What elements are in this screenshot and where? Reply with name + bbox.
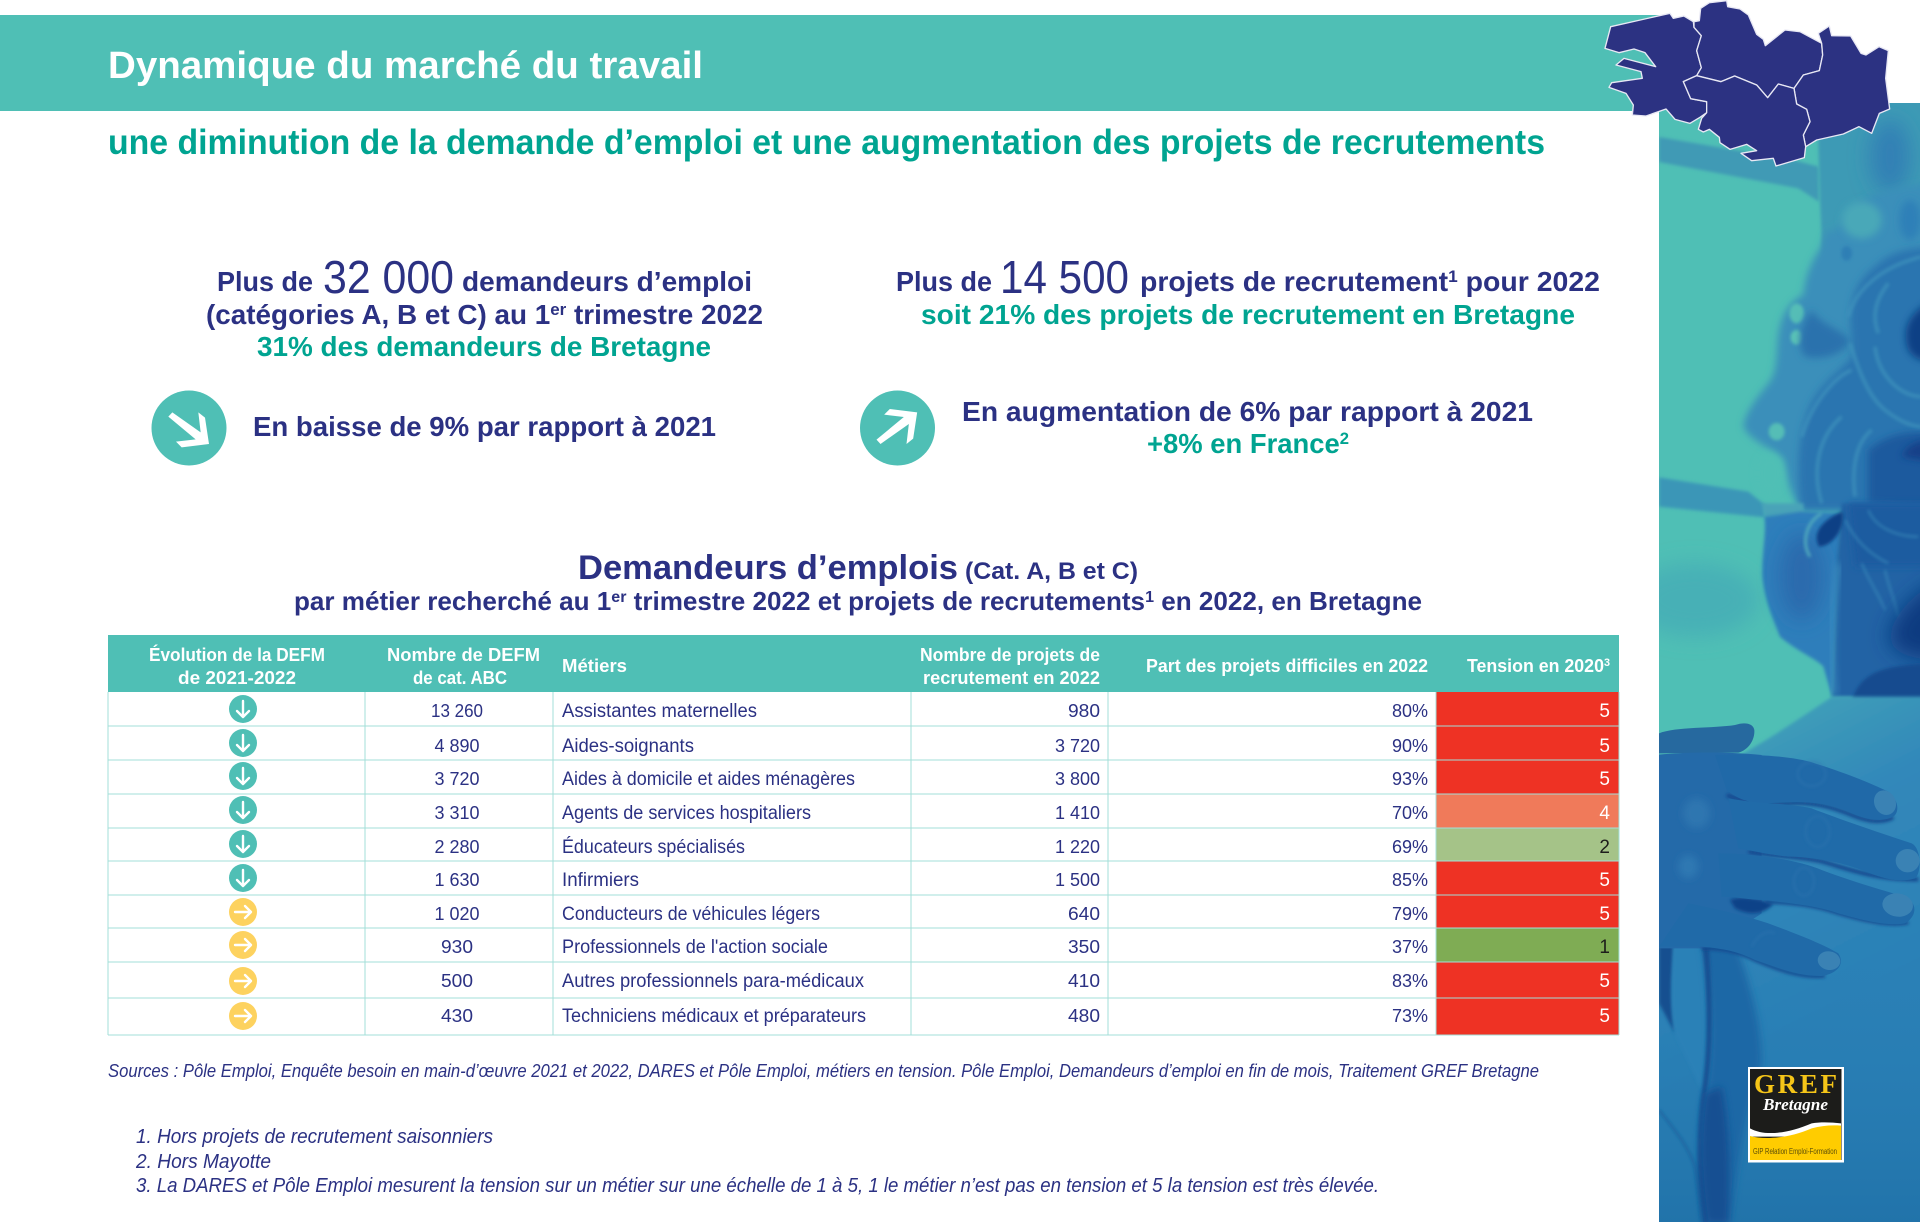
column: métiers: Éducateurs spécialisés: [562, 837, 745, 858]
column: part des projets difficiles: 70%: [1392, 803, 1428, 823]
table header row: 3: [1604, 657, 1610, 669]
column: projets de recrutement: 980: [1068, 701, 1100, 721]
icon: arrow up-right: [860, 390, 935, 466]
stat block: demandeurs d'emploi: demandeurs d’emploi: [462, 266, 752, 297]
column: part des projets difficiles: 80%: [1392, 701, 1428, 721]
column: nombre de DEFM: 2 280: [434, 837, 480, 857]
column: métiers: Autres professionnels para-médicaux: [562, 971, 864, 992]
column: projets de recrutement: 350: [1068, 937, 1100, 957]
logo: GREF Bretagne: Bretagne: [1762, 1095, 1828, 1114]
callout: augmentation: 2: [1340, 429, 1349, 448]
table header row: Part des projets difficiles en 2022: [1146, 656, 1428, 676]
column: part des projets difficiles: 37%: [1392, 937, 1428, 957]
table header row: Tension en 2020: [1467, 656, 1606, 676]
column: nombre de DEFM: 430: [441, 1006, 473, 1026]
column: tension values: 5: [1599, 904, 1610, 925]
column: projets de recrutement: 3 720: [1055, 736, 1100, 756]
stat block: projets de recrutement: pour 2022: [1458, 266, 1600, 297]
column: part des projets difficiles: [1392, 701, 1428, 1026]
callout: augmentation: +8% en France: [1147, 428, 1344, 459]
column: part des projets difficiles: 85%: [1392, 870, 1428, 890]
column: part des projets difficiles: 83%: [1392, 971, 1428, 991]
column: métiers: Agents de services hospitaliers: [562, 803, 811, 824]
column: nombre de DEFM: 3 310: [434, 803, 480, 823]
column: nombre de DEFM: 4 890: [434, 736, 480, 756]
logo: GREF Bretagne: GREF: [1754, 1069, 1837, 1099]
department: Ille-et-Vilaine: [1794, 26, 1890, 147]
column: nombre de DEFM: 930: [441, 937, 473, 957]
stat block: projets de recrutement: [896, 251, 1600, 330]
column: métiers: Techniciens médicaux et préparateurs: [562, 1006, 866, 1027]
table header row: recrutement en 2022: [923, 668, 1100, 688]
stat block: demandeurs d'emploi: 31% des demandeurs de Bretagne: [257, 331, 711, 362]
column: tension values: 5: [1599, 736, 1610, 757]
column: tension values: 5: [1599, 701, 1610, 722]
table header row: [108, 635, 1619, 692]
footnotes: [135, 1126, 1379, 1197]
column: tension values: 5: [1599, 870, 1610, 891]
column: part des projets difficiles: 69%: [1392, 837, 1428, 857]
column: métiers: Professionnels de l'action sociale: [562, 937, 828, 958]
callout: augmentation: [962, 396, 1533, 459]
column: part des projets difficiles: 93%: [1392, 769, 1428, 789]
header bar: [0, 15, 1660, 111]
column: tension values: [1599, 701, 1610, 1027]
column: projets de recrutement: 1 220: [1055, 837, 1100, 857]
logo: GREF Bretagne: GIP Relation Emploi-Formation: [1753, 1147, 1837, 1156]
photo: caregiver hand on shoulder: [1659, 103, 1920, 1222]
column: tension values: 5: [1599, 769, 1610, 790]
stat block: demandeurs d'emploi: Plus de: [217, 266, 313, 297]
column: nombre de DEFM: 500: [441, 971, 473, 991]
column: part des projets difficiles: 90%: [1392, 736, 1428, 756]
column: métiers: Infirmiers: [562, 870, 639, 891]
department: Morbihan: [1683, 76, 1810, 166]
column: métiers: Aides à domicile et aides ménagères: [562, 769, 855, 790]
stat block: projets de recrutement: Plus de: [896, 266, 992, 297]
data table: [108, 635, 1619, 1035]
department: Côtes-d'Armor: [1694, 1, 1823, 98]
column: nombre de DEFM: 13 260: [431, 701, 483, 721]
stat block: demandeurs d'emploi: er: [550, 300, 567, 319]
table header row: Nombre de DEFM: [387, 645, 540, 665]
table heading: trimestre 2022 et projets de recrutements: [626, 586, 1145, 616]
column: métiers: Aides-soignants: [562, 736, 694, 757]
table header row: Métiers: [562, 656, 627, 676]
stat block: demandeurs d'emploi: (catégories A, B et C) au 1: [206, 299, 552, 330]
column: nombre de DEFM: [431, 701, 483, 1026]
table header row: Nombre de projets de: [920, 645, 1100, 665]
column: part des projets difficiles: 73%: [1392, 1006, 1428, 1026]
cloth folds: [1659, 940, 1762, 1222]
tension cells: [1436, 692, 1619, 1035]
stat block: projets de recrutement: projets de recrutement: [1140, 266, 1443, 297]
column: tension values: 1: [1599, 937, 1610, 958]
column: nombre de DEFM: 3 720: [434, 769, 480, 789]
footnotes: 1. Hors projets de recrutement saisonniers: [136, 1126, 493, 1148]
column: tension values: 2: [1599, 837, 1610, 858]
stat block: projets de recrutement: 1: [1448, 267, 1458, 286]
hand: [1655, 723, 1920, 976]
callout: augmentation: En augmentation de 6% par rapport à 2021: [962, 396, 1533, 427]
column: part des projets difficiles: 79%: [1392, 904, 1428, 924]
table heading: 1: [1145, 589, 1154, 606]
column: nombre de DEFM: 1 630: [434, 870, 480, 890]
stat block: projets de recrutement: 14 500: [1000, 251, 1129, 303]
column: tension values: 5: [1599, 1006, 1610, 1027]
column: projets de recrutement: 410: [1068, 971, 1100, 991]
title: Dynamique du marché du travail: [108, 45, 703, 87]
column: métiers: Conducteurs de véhicules légers: [562, 904, 820, 925]
stat block: demandeurs d'emploi: [206, 251, 763, 362]
column: projets de recrutement: 640: [1068, 904, 1100, 924]
table header row: de cat. ABC: [413, 668, 507, 688]
table heading: (Cat. A, B et C): [965, 558, 1138, 585]
stat block: demandeurs d'emploi: 32 000: [323, 251, 454, 303]
column: projets de recrutement: [1055, 701, 1100, 1026]
sources: Sources : Pôle Emploi, Enquête besoin en main-d’œuvre 2021 et 2022, DARES et Pôle Emploi, métiers en tension. Pôle Emploi, Demandeurs d’emploi en fin de mois, Traitement GREF Bretagne: [108, 1061, 1539, 1081]
table heading: [294, 549, 1422, 616]
column: tension values: 4: [1599, 803, 1610, 824]
column: projets de recrutement: 3 800: [1055, 769, 1100, 789]
icon: arrow down-right: [152, 390, 226, 466]
table header row: de 2021-2022: [178, 668, 296, 688]
column: tension values: 5: [1599, 971, 1610, 992]
subtitle: une diminution de la demande d’emploi et une augmentation des projets de recrutements: [108, 123, 1545, 162]
logo: GREF Bretagne: [1748, 1067, 1844, 1162]
stat block: projets de recrutement: soit 21% des projets de recrutement en Bretagne: [921, 299, 1575, 330]
table header row: Évolution de la DEFM: [149, 644, 325, 665]
column: projets de recrutement: 1 410: [1055, 803, 1100, 823]
table heading: en 2022, en Bretagne: [1154, 586, 1422, 616]
column: métiers: [562, 701, 866, 1027]
stat block: demandeurs d'emploi: trimestre 2022: [566, 299, 763, 330]
callout: baisse: En baisse de 9% par rapport à 2021: [253, 411, 716, 442]
column: projets de recrutement: 1 500: [1055, 870, 1100, 890]
table heading: par métier recherché au 1: [294, 586, 610, 616]
column: nombre de DEFM: 1 020: [434, 904, 480, 924]
table heading: er: [611, 589, 626, 606]
table heading: Demandeurs d’emplois: [578, 549, 958, 587]
footnotes: 3. La DARES et Pôle Emploi mesurent la tension sur un métier sur une échelle de 1 à 5, 1 le métier n’est pas en tension et 5 la tension est très élevée.: [136, 1175, 1379, 1197]
map of Bretagne departments: [1605, 1, 1890, 166]
column: métiers: Assistantes maternelles: [562, 701, 757, 722]
department: Finistère: [1605, 13, 1707, 123]
footnotes: 2. Hors Mayotte: [135, 1151, 271, 1173]
column: projets de recrutement: 480: [1068, 1006, 1100, 1026]
row icons: evolution arrows: [229, 695, 257, 1030]
